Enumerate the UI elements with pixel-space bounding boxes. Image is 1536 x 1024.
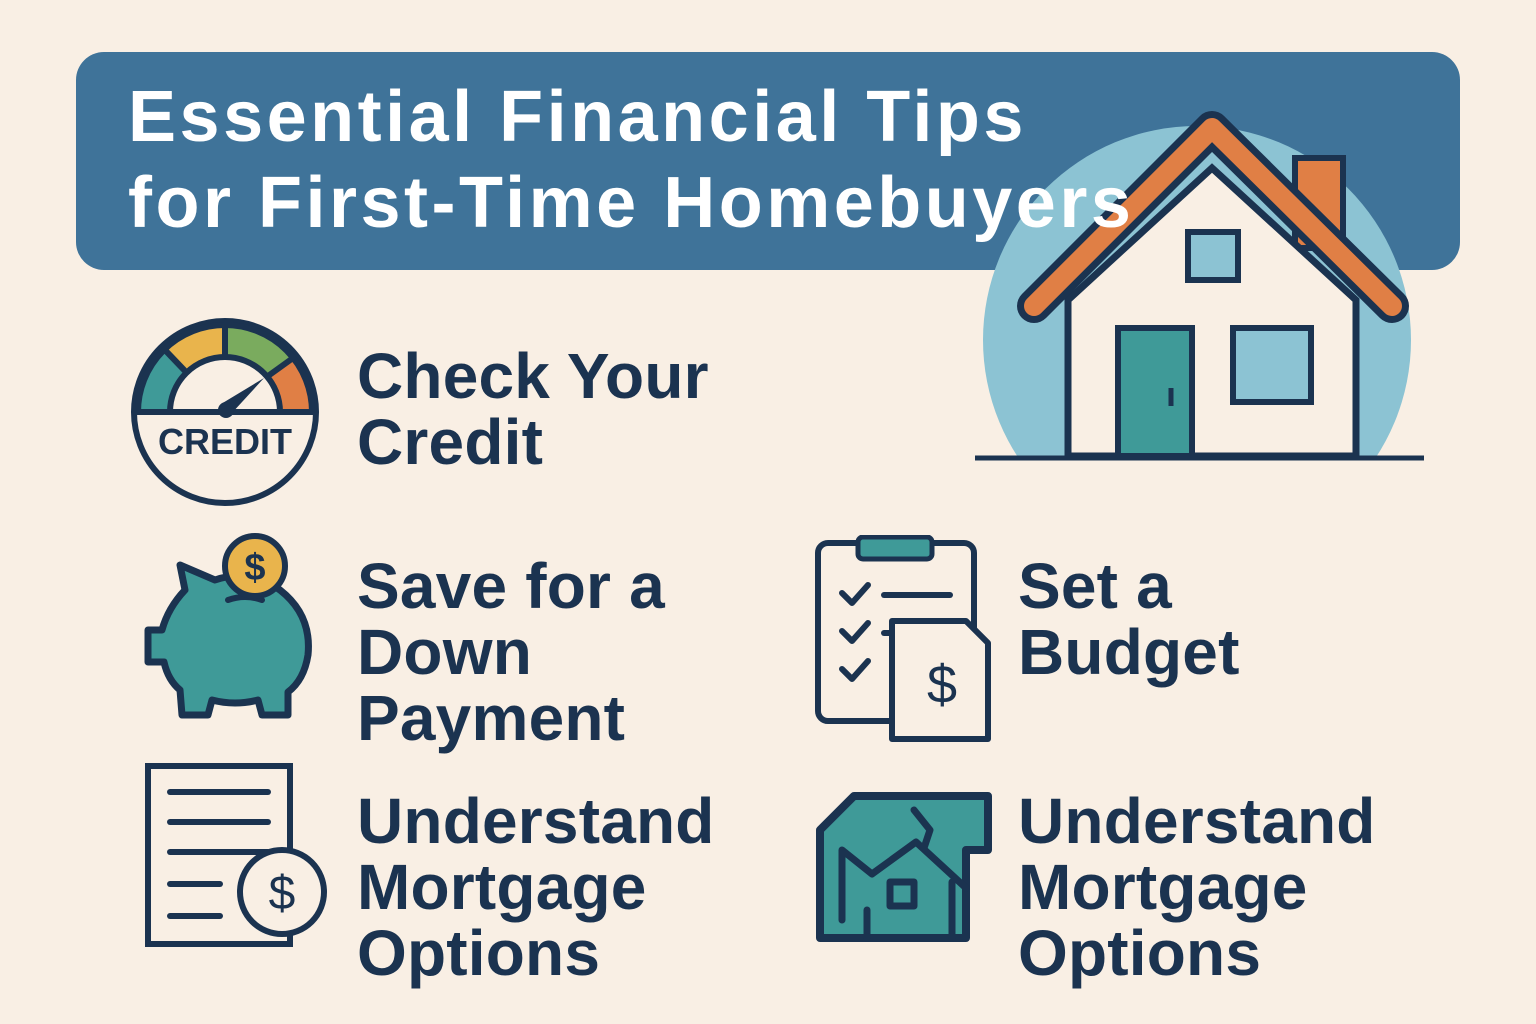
icon: credit gauge: CREDIT: [158, 421, 292, 462]
icon: house map: [816, 792, 992, 942]
text: set a budget: [1018, 550, 1240, 688]
text: set a budget: Set a: [1018, 550, 1172, 622]
text: mortgage options 1: Understand: [357, 785, 715, 857]
icon: mortgage document: [145, 763, 327, 947]
icon: budget clipboard: [815, 535, 991, 742]
text: check credit: [357, 340, 709, 478]
text: check credit: Check Your: [357, 340, 709, 412]
text: mortgage options 2: Mortgage: [1018, 851, 1308, 923]
text: check credit: Credit: [357, 406, 543, 478]
title banner: [76, 52, 1460, 270]
text: down payment: Save for a: [357, 550, 665, 622]
text: mortgage options 1: Mortgage: [357, 851, 647, 923]
icon: piggy bank: [144, 533, 312, 718]
text: mortgage options 1: [357, 785, 715, 989]
icon: budget clipboard: $: [927, 655, 957, 715]
text: mortgage options 2: Understand: [1018, 785, 1376, 857]
text: mortgage options 2: Options: [1018, 917, 1261, 989]
text: mortgage options 1: Options: [357, 917, 600, 989]
title text: for First-Time Homebuyers: [128, 163, 1134, 243]
title text: Essential Financial Tips: [128, 77, 1027, 157]
text: down payment: Payment: [357, 682, 625, 754]
icon: credit gauge: [131, 318, 319, 506]
icon: mortgage document: $: [269, 867, 295, 920]
text: down payment: Down: [357, 616, 532, 688]
text: mortgage options 2: [1018, 785, 1376, 989]
title text: [128, 77, 1134, 243]
text: set a budget: Budget: [1018, 616, 1240, 688]
text: down payment: [357, 550, 666, 754]
icon: piggy bank: $: [244, 547, 266, 589]
